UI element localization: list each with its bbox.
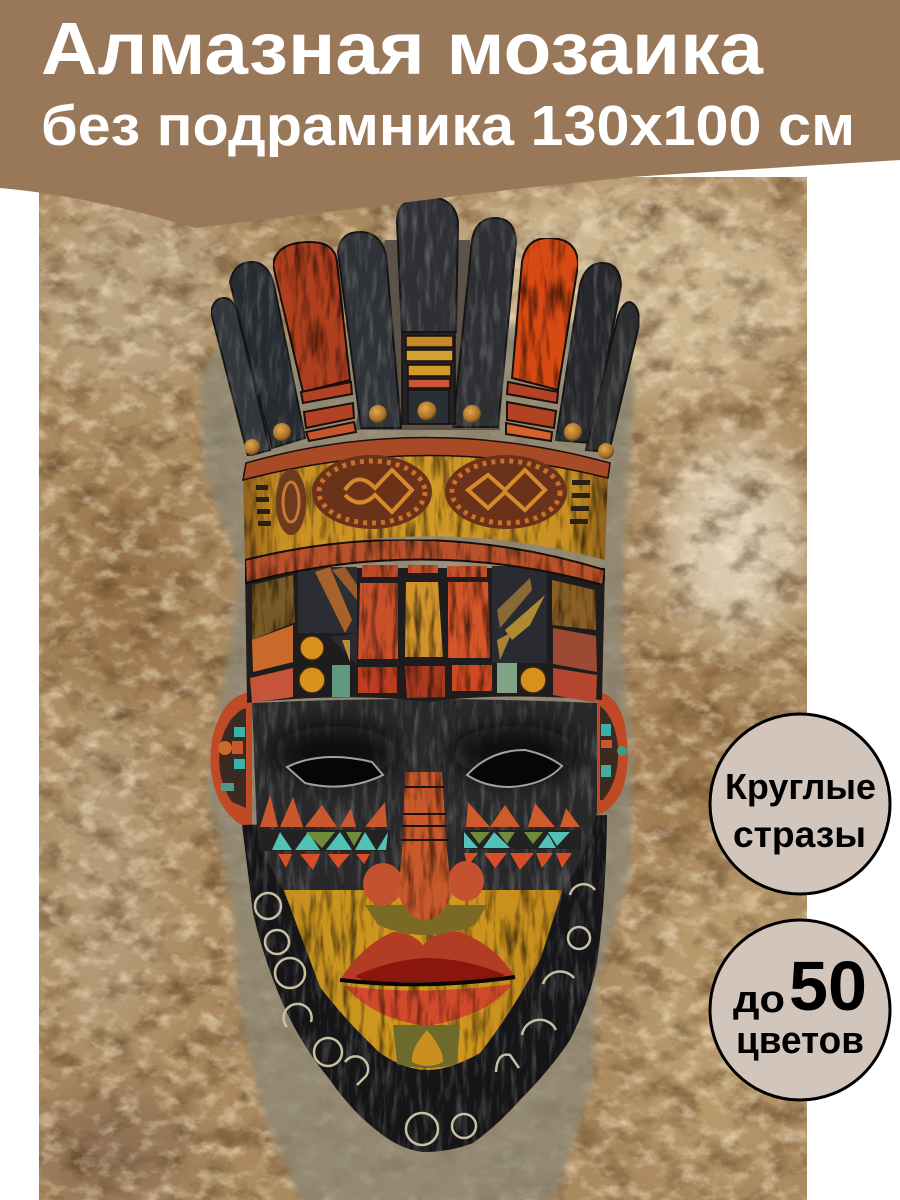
background plaster photo <box>30 177 820 1200</box>
small side oval <box>276 469 306 535</box>
badge: up to 50 colours: до <box>733 979 785 1021</box>
right side panels <box>552 580 596 630</box>
eye sockets shadow <box>273 726 577 778</box>
teal tiles <box>332 663 517 697</box>
bridge <box>398 772 452 921</box>
upper face <box>252 699 597 890</box>
badge: up to 50 colours: цветов <box>736 1020 864 1062</box>
mask shadow on the wall <box>200 320 636 1200</box>
red feathers <box>273 238 578 392</box>
right ear <box>597 692 628 815</box>
title line 2: без подрамника 130х100 см <box>41 94 855 158</box>
right geometric panel <box>492 566 547 663</box>
left geometric panel <box>298 567 357 665</box>
upper lip <box>340 932 515 980</box>
lower lip <box>345 984 512 1026</box>
left oval <box>312 455 432 529</box>
headdress feathers <box>211 197 639 459</box>
mouth line <box>340 977 515 984</box>
left red feather bands <box>301 382 558 441</box>
nose <box>363 772 484 921</box>
cheek triangles <box>260 795 581 870</box>
right cheek <box>463 802 581 870</box>
title <box>41 7 855 158</box>
left ear <box>210 692 252 828</box>
mask <box>210 197 639 1152</box>
centre feather band <box>402 332 455 424</box>
badge: up to 50 colours <box>710 920 890 1100</box>
shield <box>242 815 607 1152</box>
yellow band <box>243 446 608 565</box>
forehead discs <box>299 635 546 693</box>
badge: round rhinestones: Круглые <box>725 766 876 807</box>
ears <box>210 692 628 828</box>
left eye <box>287 757 383 787</box>
right eye <box>467 750 562 787</box>
left side panels <box>252 575 295 640</box>
badge: round rhinestones <box>710 714 890 894</box>
lips <box>340 932 515 1026</box>
top banner <box>0 0 900 228</box>
shield rings <box>255 884 595 1145</box>
badge: round rhinestones: стразы <box>733 814 866 855</box>
bottom rim <box>245 540 605 585</box>
chin marking <box>393 1025 460 1068</box>
feather backing <box>355 240 500 430</box>
title line 1: Алмазная мозаика <box>41 7 764 90</box>
yellow chin <box>283 888 563 1070</box>
badge: up to 50 colours: 50 <box>789 947 867 1025</box>
top rim <box>243 438 610 480</box>
brass rivets <box>244 402 614 459</box>
mouth interior <box>355 958 505 982</box>
nostrils <box>363 861 484 905</box>
centre tiles <box>358 565 492 698</box>
side stripes left <box>256 485 271 526</box>
right oval <box>445 455 567 529</box>
forehead panels <box>245 565 605 703</box>
left cheek <box>260 795 390 870</box>
lower jaw shield with rings <box>242 815 607 1152</box>
dark feathers <box>211 197 639 456</box>
olive shade under nose <box>365 905 487 935</box>
bridge lines <box>401 787 448 840</box>
side stripes right <box>570 480 590 524</box>
crown band <box>243 438 610 585</box>
